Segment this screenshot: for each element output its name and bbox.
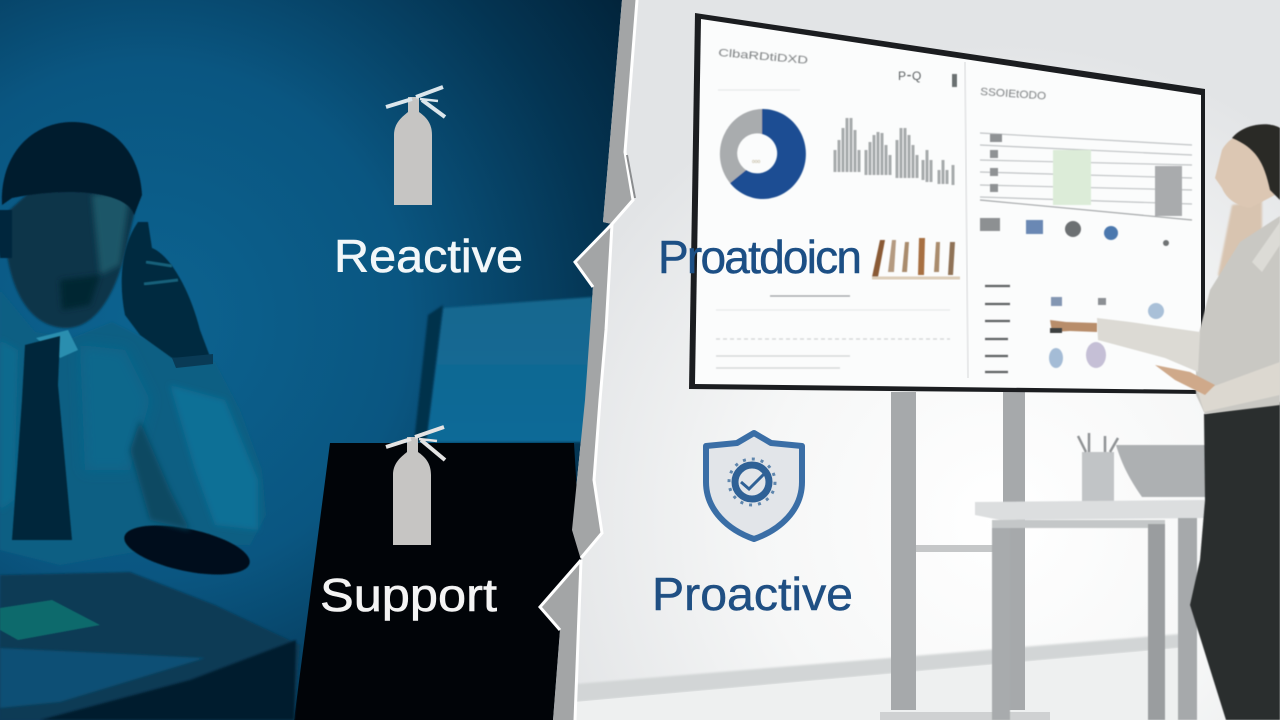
list lines — [985, 286, 1010, 372]
blouse — [1196, 216, 1280, 414]
donut chart — [720, 109, 806, 199]
gear ring — [735, 465, 769, 499]
ear — [0, 210, 12, 258]
collar — [36, 330, 78, 358]
lower torn notch — [540, 560, 581, 720]
sleeve highlight — [170, 385, 258, 530]
wall screen — [658, 13, 1205, 394]
top widget mark — [952, 74, 957, 87]
panel divider — [965, 62, 968, 378]
mouth shadow — [60, 275, 100, 310]
background monitor — [426, 297, 592, 442]
left shoulder highlight — [0, 340, 18, 510]
elbow shadow — [120, 516, 254, 584]
pointing hand — [1050, 320, 1097, 332]
fingertip shadow — [1050, 328, 1062, 333]
desk lower shadow — [40, 640, 296, 720]
table legs — [992, 528, 1010, 720]
label overlay: garbled Proactive: Proatdoicn — [658, 231, 862, 283]
pens — [1078, 433, 1118, 452]
blouse collar — [1252, 222, 1280, 272]
figure: presenting woman — [1050, 124, 1280, 720]
laptop — [1116, 445, 1208, 497]
head — [4, 165, 140, 328]
pointing sleeve — [1097, 318, 1200, 372]
divider: torn grey strip — [540, 0, 637, 720]
cheek highlight — [92, 190, 130, 275]
shirt — [0, 290, 266, 565]
fine text rows — [716, 90, 950, 368]
lower icons — [1049, 297, 1164, 368]
screen surface — [695, 19, 1201, 390]
icon: fire extinguisher top — [386, 87, 445, 205]
gear teeth — [729, 459, 775, 505]
fingers — [144, 262, 178, 284]
small icons row — [980, 218, 1169, 246]
lower arm — [1198, 362, 1280, 412]
face — [1215, 134, 1275, 208]
donut chart: ooo — [752, 159, 761, 165]
table top — [975, 500, 1205, 520]
panel: proactive office background — [530, 0, 1280, 720]
paper — [0, 600, 100, 640]
trousers — [1190, 402, 1280, 720]
top widget: P⁃Q — [898, 69, 921, 83]
neck — [1218, 200, 1262, 285]
stand legs — [880, 392, 1050, 720]
chest highlight — [80, 345, 150, 470]
arm fold shadow — [130, 420, 190, 530]
monitor bezel shadow — [414, 305, 443, 442]
hair — [2, 122, 142, 215]
screen frame — [689, 13, 1205, 394]
hair — [1232, 124, 1280, 200]
desk highlight — [0, 648, 205, 708]
bar chart grey — [835, 118, 953, 185]
label: Reactive: Reactive — [334, 230, 523, 282]
right title: SSOIEtODO — [980, 86, 1047, 103]
left title: ClbaRDtiDXD — [718, 47, 808, 67]
label: Proactive: Proactive — [652, 568, 853, 620]
dark laptop — [294, 443, 581, 720]
lower hand — [1155, 365, 1215, 395]
table front rail — [992, 520, 1165, 528]
icon: fire extinguisher bottom — [386, 427, 445, 545]
pen cup — [1082, 452, 1114, 502]
watch cuff — [172, 354, 213, 368]
desk surface — [0, 572, 300, 720]
desk with pen holder and laptop — [975, 433, 1208, 720]
label: Support: Support — [320, 569, 497, 621]
table — [980, 133, 1192, 220]
hand and phone — [122, 222, 212, 362]
bar chart brown — [872, 238, 960, 278]
icon: shield with gear and check — [706, 433, 802, 539]
tie — [12, 336, 72, 540]
panel: reactive dark office background — [0, 0, 622, 720]
check mark — [741, 474, 764, 489]
figure: stressed man on phone — [0, 122, 266, 584]
